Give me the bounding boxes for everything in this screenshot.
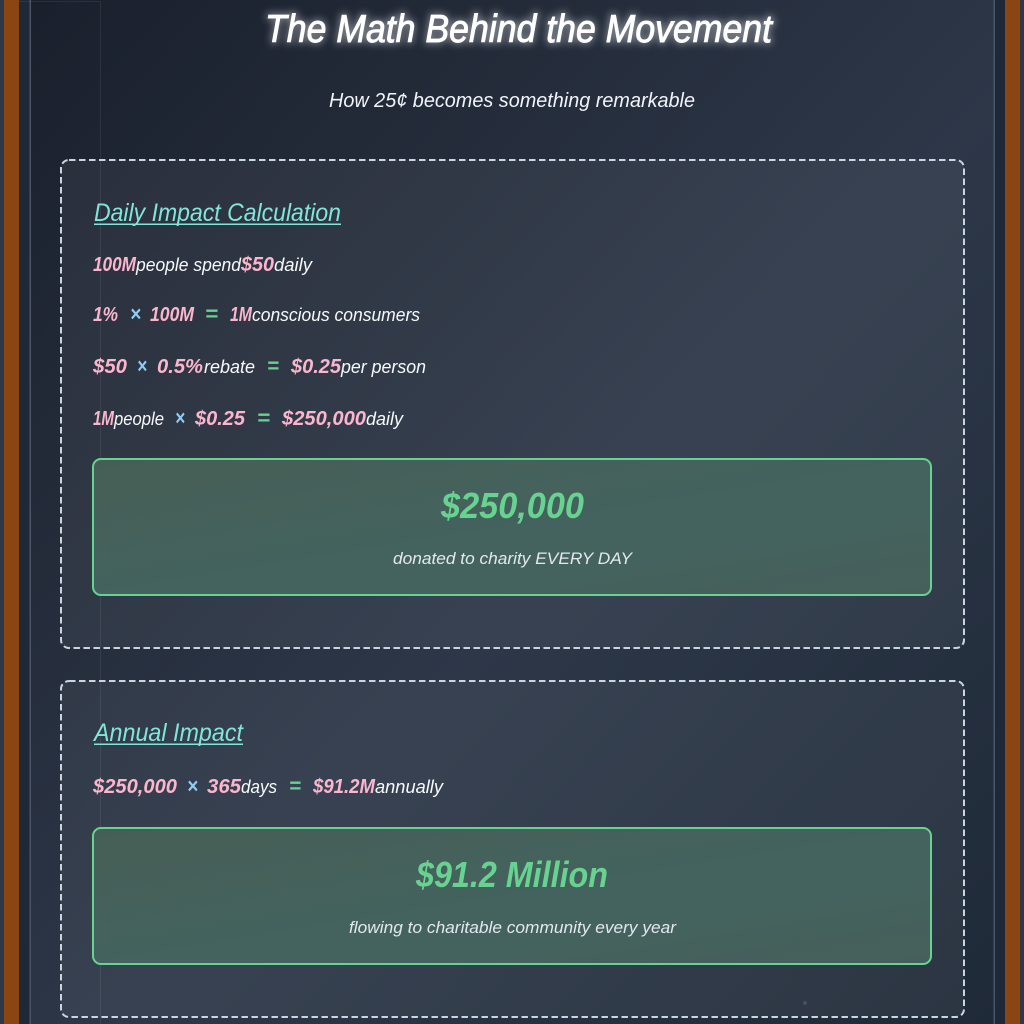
left brown border stripe bbox=[4, 0, 19, 1024]
title: The Math Behind the Movement bbox=[265, 8, 774, 51]
calculation line: rebate per person: 0.5% bbox=[157, 356, 203, 378]
calculation line: daily total: 1M bbox=[93, 408, 115, 430]
calculation line: rebate per person: = bbox=[267, 355, 279, 378]
calculation line: daily total bbox=[93, 407, 404, 430]
callout: $91.2 million annual result: $91.2 Million bbox=[415, 854, 608, 895]
calculation line: 1% of 100M: 1M bbox=[230, 304, 253, 326]
panel: daily impact calculation bbox=[61, 160, 964, 648]
calculation line: annual total: 365 bbox=[207, 776, 242, 798]
calculation line: rebate per person: rebate bbox=[204, 357, 255, 377]
subtitle: How 25¢ becomes something remarkable bbox=[329, 90, 695, 112]
calculation line: 1% of 100M: × bbox=[130, 303, 141, 326]
calculation line: 100M people spend $50 daily bbox=[93, 254, 313, 276]
title: The Math Behind the Movement bbox=[265, 8, 774, 51]
calculation line: daily total: daily bbox=[366, 409, 404, 429]
callout: $250,000 daily result bbox=[93, 459, 931, 595]
panel: annual impact bbox=[61, 681, 964, 1017]
calculation line: rebate per person: per person bbox=[340, 357, 426, 377]
calculation line: rebate per person: $0.25 bbox=[290, 356, 342, 378]
calculation line: daily total: × bbox=[175, 407, 185, 430]
calculation line: annual total bbox=[92, 775, 444, 798]
calculation line: 1% of 100M bbox=[93, 303, 420, 326]
calculation line: annual total: × bbox=[187, 775, 198, 798]
calculation line: annual total: = bbox=[289, 775, 301, 798]
calculation line: daily total: $250,000 bbox=[281, 408, 366, 430]
calculation line: rebate per person: × bbox=[137, 355, 147, 378]
calculation line: 1% of 100M: 100M bbox=[150, 304, 195, 326]
calculation line: annual total: $91.2M bbox=[312, 776, 376, 798]
calculation line: rebate per person bbox=[92, 355, 426, 378]
callout: $250,000 daily result: donated to charity EVERY DAY bbox=[393, 549, 634, 568]
calculation line: 100M people spend $50 daily: 100M bbox=[93, 254, 137, 276]
callout: $91.2 million annual result: flowing to charitable community every year bbox=[349, 918, 677, 937]
calculation line: 100M people spend $50 daily: $50 bbox=[240, 254, 274, 276]
calculation line: 100M people spend $50 daily: daily bbox=[274, 255, 313, 275]
calculation line: annual total: days bbox=[241, 777, 277, 797]
calculation line: annual total: $250,000 bbox=[92, 776, 177, 798]
heading: annual impact: Annual Impact bbox=[92, 719, 244, 747]
calculation line: rebate per person: $50 bbox=[92, 356, 127, 378]
heading: daily impact calculation: Daily Impact Calculation bbox=[94, 199, 341, 227]
calculation line: daily total: = bbox=[257, 407, 270, 430]
calculation line: annual total: annually bbox=[375, 777, 444, 797]
calculation line: daily total: $0.25 bbox=[194, 408, 246, 430]
calculation line: 1% of 100M: = bbox=[205, 303, 218, 326]
callout: $91.2 million annual result bbox=[93, 828, 931, 964]
right brown border stripe bbox=[1005, 0, 1020, 1024]
callout: $250,000 daily result: $250,000 bbox=[440, 485, 584, 526]
calculation line: 1% of 100M: 1% bbox=[93, 304, 118, 326]
calculation line: 1% of 100M: conscious consumers bbox=[252, 305, 420, 325]
calculation line: 100M people spend $50 daily: people spend bbox=[135, 255, 242, 275]
calculation line: daily total: people bbox=[113, 409, 164, 429]
